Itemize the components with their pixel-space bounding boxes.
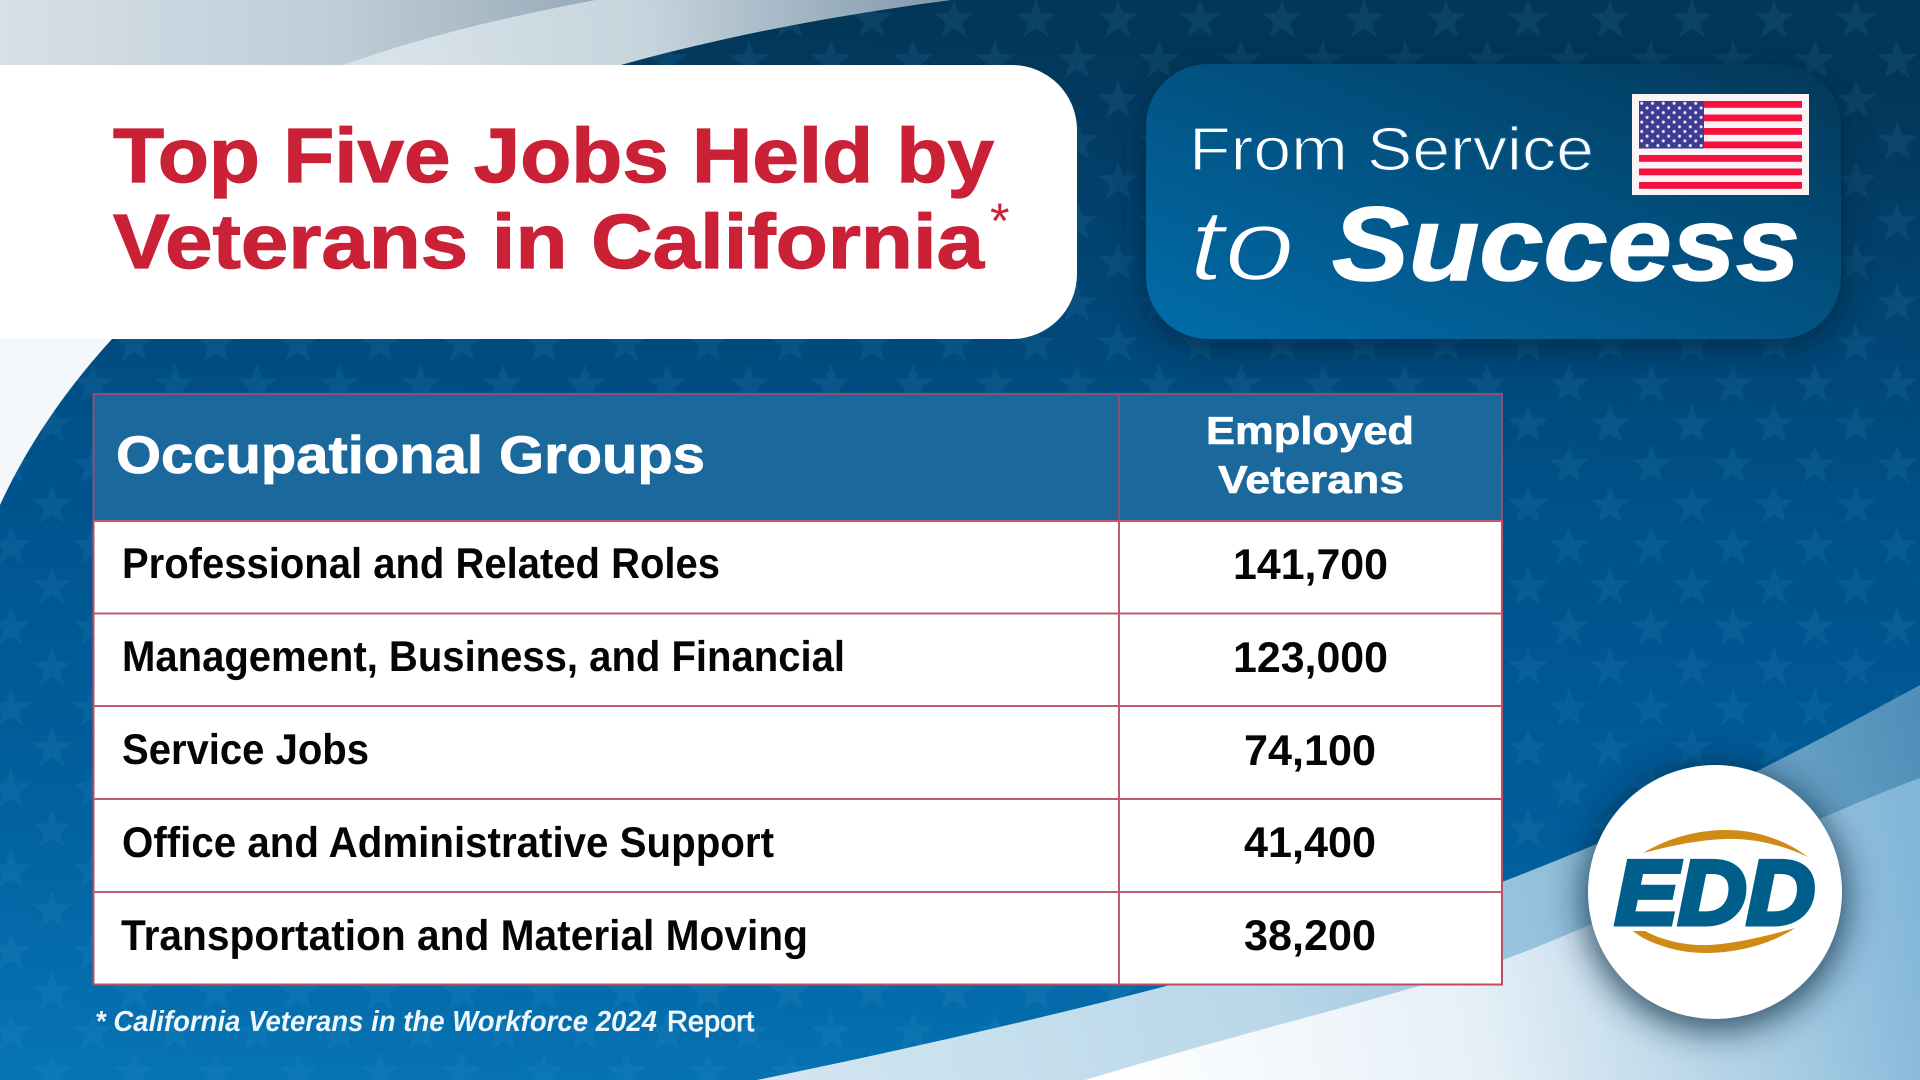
table header: Occupational Groups — [116, 426, 705, 485]
row: Professional and Related Roles: Professional and Related Roles — [122, 540, 720, 588]
title text: Top Five Jobs Held by — [113, 113, 994, 199]
slogan text: From Service — [1189, 115, 1594, 183]
row: Management, Business, and Financial: Management, Business, and Financial — [122, 633, 845, 681]
icon: american flag — [1632, 94, 1809, 195]
title text — [113, 113, 1009, 285]
row: Service Jobs: 74,100 — [1244, 727, 1376, 775]
row: Professional and Related Roles — [122, 540, 1388, 589]
title text: Veterans in California — [113, 199, 985, 285]
table body — [94, 521, 1502, 985]
row: Management, Business, and Financial: 123,000 — [1233, 634, 1388, 682]
title panel — [0, 65, 1077, 339]
table header: Employed — [1206, 410, 1414, 453]
slogan text: to — [1189, 188, 1295, 302]
row: Transportation and Material Moving: Transportation and Material Moving — [121, 912, 808, 960]
row: Service Jobs: Service Jobs — [122, 726, 369, 774]
row: Office and Administrative Support: Office and Administrative Support — [122, 819, 774, 867]
table header — [94, 394, 1502, 521]
row: Transportation and Material Moving: 38,200 — [1244, 912, 1376, 960]
table header: Veterans — [1218, 459, 1404, 502]
row: Office and Administrative Support: 41,400 — [1244, 819, 1376, 867]
footnote: * California Veterans in the Workforce 2024 — [95, 1006, 657, 1038]
row: Transportation and Material Moving — [121, 912, 1376, 960]
panel: From Service to Success — [1146, 64, 1841, 346]
icon: EDD lower arc — [1633, 928, 1795, 953]
title text: * — [990, 193, 1009, 249]
footnote: Report — [667, 1006, 754, 1038]
top-left swoosh — [0, 0, 950, 505]
row: Professional and Related Roles: 141,700 — [1233, 541, 1388, 589]
slogan text: Success — [1332, 186, 1800, 303]
icon: EDD upper arc — [1643, 830, 1808, 857]
logo badge: EDD — [1583, 765, 1847, 1031]
row: Management, Business, and Financial — [122, 633, 1388, 682]
row: Service Jobs — [122, 726, 1376, 775]
table — [94, 394, 1502, 985]
bottom-right swoosh — [757, 685, 1920, 1080]
slogan text — [1189, 115, 1800, 303]
row: Office and Administrative Support — [122, 819, 1376, 867]
EDD lettering: EDD — [1615, 843, 1815, 944]
